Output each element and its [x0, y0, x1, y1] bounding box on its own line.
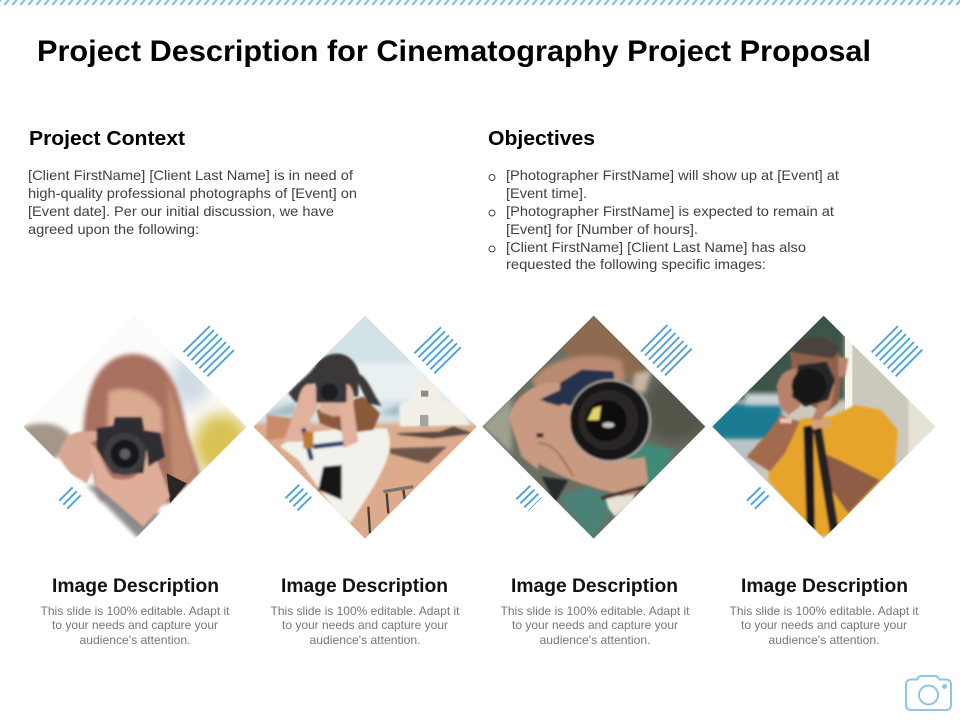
- heading: objectives: Objectives: [488, 128, 595, 150]
- list: objectives bullets: [489, 167, 839, 272]
- text block: project context body: [Event date]. Per our initial discussion, we have: [28, 203, 334, 219]
- image panel 2: woman in hat: [250, 313, 480, 543]
- caption 4: audience's attention.: [768, 633, 880, 647]
- list: objectives bullets: [Event time].: [506, 185, 587, 201]
- icon: camera: [906, 676, 951, 710]
- caption 1: Image Description: [52, 576, 219, 597]
- image panel 4: man in yellow shirt: [708, 313, 938, 543]
- caption 1: This slide is 100% editable. Adapt it: [40, 604, 230, 618]
- text block: project context body: high-quality professional photographs of [Event] on: [28, 185, 357, 201]
- stripes: [285, 327, 461, 510]
- text block: project context body: [28, 167, 357, 237]
- list: objectives bullets: [Photographer FirstName] will show up at [Event] at: [506, 167, 839, 183]
- text block: project context body: agreed upon the following:: [28, 221, 199, 237]
- caption 3: [500, 576, 690, 647]
- title: Project Description for Cinematography Project Proposal: [37, 35, 871, 68]
- caption 2: Image Description: [281, 576, 448, 597]
- caption 4: to your needs and capture your: [741, 618, 907, 632]
- caption 3: audience's attention.: [540, 633, 650, 647]
- caption 2: [270, 576, 460, 647]
- caption 1: to your needs and capture your: [52, 618, 218, 632]
- caption 3: to your needs and capture your: [512, 618, 678, 632]
- caption 4: This slide is 100% editable. Adapt it: [730, 604, 919, 618]
- list: objectives bullets: requested the following specific images:: [506, 256, 766, 272]
- caption 2: This slide is 100% editable. Adapt it: [270, 604, 460, 618]
- decorative top stripe band: [0, 0, 960, 5]
- caption 4: [730, 576, 919, 647]
- stripes: [747, 326, 922, 509]
- caption 2: audience's attention.: [310, 633, 420, 647]
- image panel 3: close-up lens: [478, 313, 712, 543]
- photo diamond: [250, 313, 480, 543]
- caption 3: Image Description: [511, 576, 678, 597]
- caption 1: audience's attention.: [80, 633, 190, 647]
- panel: objectives: [488, 128, 839, 272]
- heading: project context: Project Context: [29, 128, 185, 150]
- stripes: [59, 326, 234, 509]
- text block: project context body: [Client FirstName] [Client Last Name] is in need of: [28, 167, 353, 183]
- photo diamond: [24, 350, 246, 538]
- caption 1: [40, 576, 230, 647]
- list: objectives bullets: [Event] for [Number of hours].: [506, 221, 698, 237]
- photo diamond: [708, 313, 938, 543]
- stripes: [516, 325, 692, 511]
- caption 3: This slide is 100% editable. Adapt it: [500, 604, 690, 618]
- caption 4: Image Description: [741, 576, 908, 597]
- panel: project context: [28, 128, 357, 237]
- caption 2: to your needs and capture your: [282, 618, 448, 632]
- photo diamond: [478, 313, 712, 543]
- list: objectives bullets: [Client FirstName] [Client Last Name] has also: [506, 239, 806, 255]
- list: objectives bullets: [Photographer FirstName] is expected to remain at: [506, 203, 834, 219]
- image panel 1: woman with camera: [24, 325, 246, 538]
